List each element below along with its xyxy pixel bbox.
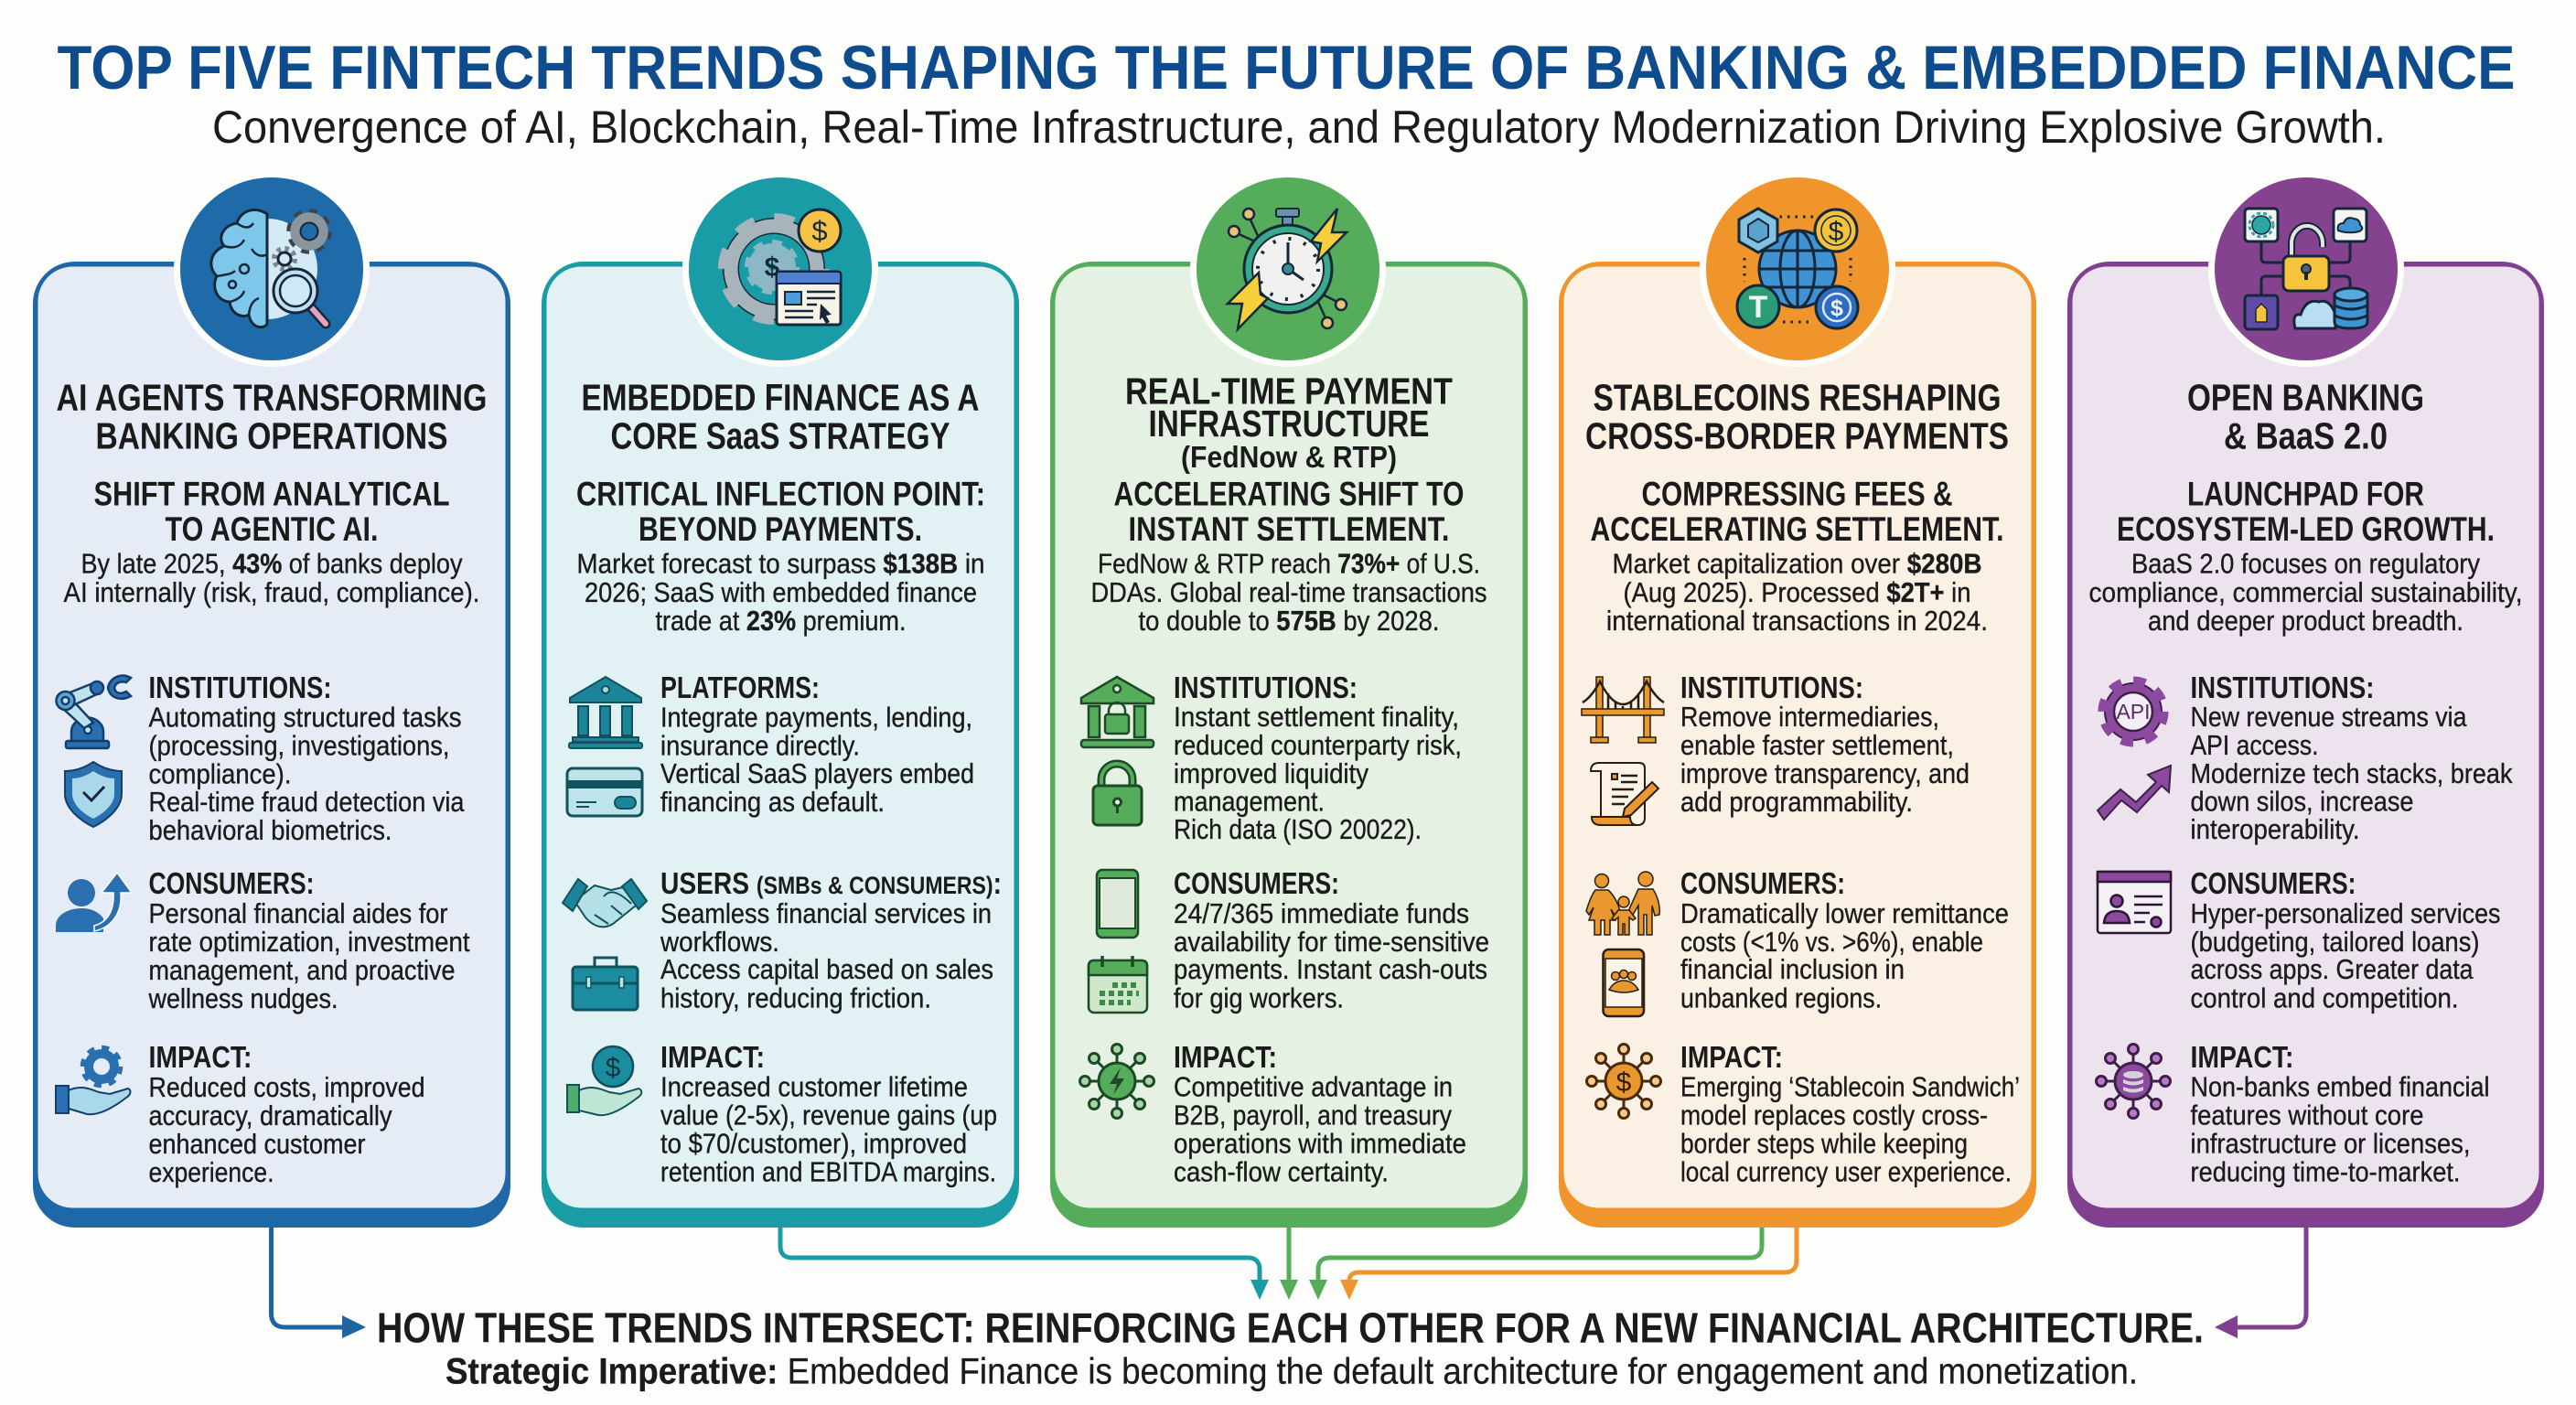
icon: phone with community bbox=[1603, 949, 1644, 1016]
panel 4 institutions text: enable faster settlement, bbox=[1680, 729, 1954, 761]
panel 3 institutions text: improved liquidity bbox=[1174, 757, 1368, 789]
panel 4 institutions text bbox=[1680, 670, 1970, 818]
panel 1 key statistic: By late 2025, 43% of banks deploy bbox=[80, 547, 463, 580]
panel 2 impact text bbox=[660, 1040, 997, 1187]
panel 3 consumers text: 24/7/365 immediate funds bbox=[1174, 897, 1469, 929]
panel 2 users text: Access capital based on sales bbox=[660, 953, 993, 985]
panel 5 heading bbox=[2187, 377, 2424, 457]
panel 4 impact text: border steps while keeping bbox=[1680, 1127, 1968, 1160]
panel 1 key statistic bbox=[64, 547, 479, 608]
panel 3 card bbox=[1050, 262, 1528, 1228]
panel 5 institutions text: API access. bbox=[2190, 729, 2318, 761]
panel 1 impact text: Reduced costs, improved bbox=[148, 1071, 424, 1103]
icon: coin on open hand: $ bbox=[606, 1053, 621, 1083]
panel 4 key statistic: (Aug 2025). Processed $2T+ in bbox=[1623, 576, 1970, 608]
panel 2 subheading bbox=[576, 476, 985, 548]
panel 1 impact text: accuracy, dramatically bbox=[148, 1099, 392, 1132]
strategic imperative line: Strategic Imperative: Embedded Finance is becoming the default architecture for engagement and monetization. bbox=[445, 1352, 2138, 1392]
panel 3 impact text: Competitive advantage in bbox=[1174, 1070, 1453, 1103]
panel 4 consumers text: unbanked regions. bbox=[1680, 982, 1882, 1014]
panel 1 consumers text: CONSUMERS: bbox=[148, 866, 315, 900]
panel 5 consumers text: (budgeting, tailored loans) bbox=[2190, 926, 2479, 958]
panel 3 subheading: INSTANT SETTLEMENT. bbox=[1129, 510, 1449, 548]
panel 2 platforms text: Integrate payments, lending, bbox=[660, 701, 972, 734]
panel 1 subheading bbox=[93, 476, 450, 548]
panel 1 institutions text: (processing, investigations, bbox=[148, 730, 450, 761]
panel 2 subheading: BEYOND PAYMENTS. bbox=[639, 510, 922, 548]
icon: network with database bbox=[2097, 1045, 2170, 1118]
panel 1 heading bbox=[57, 377, 487, 457]
panel 3 impact text: cash-flow certainty. bbox=[1174, 1156, 1389, 1187]
panel 4 institutions text: add programmability. bbox=[1680, 786, 1913, 818]
panel 5 summary: compliance, commercial sustainability, bbox=[2089, 576, 2523, 608]
panel 1 key statistic: AI internally (risk, fraud, compliance). bbox=[64, 576, 479, 608]
panel 2 impact text: retention and EBITDA margins. bbox=[660, 1156, 996, 1187]
panel 1 subheading: SHIFT FROM ANALYTICAL bbox=[93, 476, 450, 512]
panel 3 consumers text: CONSUMERS: bbox=[1174, 866, 1339, 900]
icon: gears with coin and web window: $ bbox=[811, 215, 828, 247]
arrow: blue panel to summary bbox=[271, 1228, 366, 1338]
panel 3 key statistic: DDAs. Global real-time transactions bbox=[1090, 576, 1487, 608]
panel 4 subheading bbox=[1590, 476, 2003, 548]
icon: smartphone bbox=[1097, 870, 1138, 938]
panel 1 impact text: enhanced customer bbox=[148, 1128, 366, 1160]
panel 2 key statistic: trade at 23% premium. bbox=[655, 605, 906, 637]
panel 5 impact text: reducing time-to-market. bbox=[2190, 1156, 2461, 1187]
subtitle: Convergence of AI, Blockchain, Real-Time Infrastructure, and Regulatory Modernization Driving Explosive Growth. bbox=[212, 102, 2386, 153]
panel 2 impact text: IMPACT: bbox=[660, 1040, 765, 1074]
panel 4 key statistic: Market capitalization over $280B bbox=[1612, 547, 1981, 580]
panel 4 key statistic bbox=[1606, 547, 1988, 637]
panel 4 impact text bbox=[1680, 1040, 2020, 1187]
panel 1 card bbox=[33, 262, 510, 1228]
panel 5 institutions text: interoperability. bbox=[2190, 813, 2360, 845]
panel 5 summary: and deeper product breadth. bbox=[2148, 605, 2463, 637]
arrow: purple panel to summary bbox=[2215, 1228, 2306, 1338]
panel 2 users text bbox=[660, 866, 1002, 1014]
icon: globe with stablecoins: $ bbox=[1830, 295, 1843, 321]
panel 1 institutions text bbox=[148, 670, 465, 846]
panel 5 impact text: features without core bbox=[2190, 1099, 2424, 1131]
panel 5 institutions text: Modernize tech stacks, break bbox=[2190, 757, 2513, 789]
panel 1: AI agents bbox=[33, 171, 510, 1228]
arrow: green panel to summary bbox=[1280, 1228, 1298, 1300]
panel 3 heading: (FedNow & RTP) bbox=[1181, 440, 1397, 474]
icon: globe with stablecoins: T bbox=[1749, 290, 1768, 325]
icon: coin on open hand bbox=[567, 1046, 641, 1115]
panel 2 impact text: to $70/customer), improved bbox=[660, 1127, 967, 1160]
icon: bank with padlock bbox=[1081, 677, 1154, 747]
panel 2 platforms text: PLATFORMS: bbox=[660, 670, 820, 704]
panel 4 heading: CROSS-BORDER PAYMENTS bbox=[1585, 415, 2009, 457]
panel 3 key statistic: FedNow & RTP reach 73%+ of U.S. bbox=[1098, 547, 1480, 580]
panel 3 heading: INFRASTRUCTURE bbox=[1149, 402, 1429, 445]
icon: suspension bridge bbox=[1582, 677, 1664, 743]
panel 4: stablecoins bbox=[1559, 171, 2036, 1228]
panel 3 impact text: IMPACT: bbox=[1174, 1040, 1277, 1074]
panel 4 institutions text: INSTITUTIONS: bbox=[1680, 670, 1863, 704]
icon: API gear bbox=[2103, 681, 2163, 742]
icon: robot arm bbox=[57, 676, 131, 748]
panel 1 heading: AI AGENTS TRANSFORMING bbox=[57, 377, 487, 419]
panel 2 heading bbox=[582, 377, 979, 457]
panel 1 impact text bbox=[148, 1040, 424, 1188]
panel 2 platforms text: Vertical SaaS players embed bbox=[660, 757, 974, 789]
panel 5 institutions text bbox=[2190, 670, 2513, 845]
icon: padlock bbox=[1093, 764, 1142, 825]
panel 4 consumers text bbox=[1680, 866, 2009, 1014]
panel 1 subheading: TO AGENTIC AI. bbox=[165, 510, 379, 548]
panel 5 institutions text: INSTITUTIONS: bbox=[2190, 670, 2375, 704]
panel 5 consumers text: control and competition. bbox=[2190, 982, 2459, 1014]
panel 5 consumers text: Hyper-personalized services bbox=[2190, 897, 2501, 929]
panel 3 key statistic: to double to 575B by 2028. bbox=[1138, 605, 1440, 637]
panel 5 consumers text bbox=[2190, 866, 2501, 1014]
icon: credit card bbox=[567, 768, 642, 816]
icon: gears with coin and web window bbox=[682, 171, 878, 367]
icon: padlock with connected services bbox=[2208, 171, 2404, 367]
icon: network with dollar bbox=[1586, 1045, 1661, 1118]
panel 4 key statistic: international transactions in 2024. bbox=[1606, 605, 1988, 637]
panel 2 platforms text: financing as default. bbox=[660, 786, 885, 818]
panel 3 consumers text bbox=[1174, 866, 1489, 1014]
panel 3 consumers text: availability for time-sensitive bbox=[1174, 926, 1489, 958]
panel 2 users text: USERS (SMBs & CONSUMERS): bbox=[660, 866, 1002, 900]
panel 1 consumers text: rate optimization, investment bbox=[148, 926, 470, 958]
panel 2 heading: EMBEDDED FINANCE AS A bbox=[582, 377, 979, 419]
panel 4 consumers text: financial inclusion in bbox=[1680, 953, 1905, 985]
panel 3 heading: REAL-TIME PAYMENT bbox=[1125, 370, 1453, 412]
panel 1 impact text: IMPACT: bbox=[148, 1040, 252, 1074]
panel 2 users text: Seamless financial services in bbox=[660, 897, 992, 929]
panel 5 card bbox=[2067, 262, 2544, 1228]
icon: family bbox=[1586, 872, 1659, 935]
icon: person with rising arrow bbox=[56, 873, 132, 932]
panel 2 users text: workflows. bbox=[660, 926, 779, 958]
panel 4 subheading: COMPRESSING FEES & bbox=[1641, 476, 1952, 512]
panel 2 impact text: value (2-5x), revenue gains (up bbox=[660, 1099, 997, 1131]
panel 1 impact text: experience. bbox=[148, 1156, 274, 1188]
panel 2 users text: history, reducing friction. bbox=[660, 982, 931, 1014]
panel 1 institutions text: Real-time fraud detection via bbox=[148, 786, 465, 818]
panel 4 card bbox=[1559, 262, 2036, 1228]
panel 4 impact text: local currency user experience. bbox=[1680, 1156, 2012, 1187]
panel 3 institutions text: INSTITUTIONS: bbox=[1174, 670, 1358, 704]
panel 3 impact text: B2B, payroll, and treasury bbox=[1174, 1099, 1452, 1131]
summary headline: HOW THESE TRENDS INTERSECT: REINFORCING EACH OTHER FOR A NEW FINANCIAL ARCHITECTURE. bbox=[377, 1304, 2204, 1352]
panel 2 key statistic: Market forecast to surpass $138B in bbox=[576, 547, 984, 580]
panel 3 institutions text: management. bbox=[1174, 785, 1325, 818]
panel 1 heading: BANKING OPERATIONS bbox=[95, 415, 448, 457]
panel 3 heading bbox=[1125, 370, 1453, 474]
panel 1 institutions text: compliance). bbox=[148, 757, 291, 790]
panel 3 subheading bbox=[1114, 476, 1464, 548]
icon: contract scroll with pen bbox=[1591, 763, 1658, 825]
panel 2 impact text: Increased customer lifetime bbox=[660, 1070, 968, 1103]
panel 4 institutions text: improve transparency, and bbox=[1680, 757, 1970, 789]
panel 1 institutions text: INSTITUTIONS: bbox=[148, 670, 331, 704]
panel 2 heading: CORE SaaS STRATEGY bbox=[611, 415, 950, 457]
icon: gear on open hand bbox=[56, 1048, 130, 1114]
icon: globe with stablecoins bbox=[1700, 171, 1895, 367]
icon: network with dollar: $ bbox=[1616, 1067, 1632, 1098]
panel 4 institutions text: Remove intermediaries, bbox=[1680, 701, 1939, 733]
panel 5 institutions text: New revenue streams via bbox=[2190, 701, 2467, 733]
icon: bank building bbox=[569, 677, 642, 748]
panel 5 subheading: LAUNCHPAD FOR bbox=[2187, 476, 2424, 512]
panel 5 summary: BaaS 2.0 focuses on regulatory bbox=[2131, 547, 2480, 580]
icon: stopwatch with lightning bbox=[1190, 171, 1386, 367]
panel 3 subheading: ACCELERATING SHIFT TO bbox=[1114, 476, 1464, 512]
panel 5 subheading: ECOSYSTEM-LED GROWTH. bbox=[2117, 510, 2495, 548]
panel 3 consumers text: for gig workers. bbox=[1174, 982, 1344, 1014]
panel 2 platforms text: insurance directly. bbox=[660, 730, 860, 761]
panel 5 institutions text: down silos, increase bbox=[2190, 785, 2413, 818]
panel 5 heading: & BaaS 2.0 bbox=[2224, 415, 2388, 457]
arrow: teal panel to summary bbox=[780, 1228, 1269, 1300]
icon: brain with gears and magnifier bbox=[174, 171, 370, 367]
panel 5 summary bbox=[2089, 547, 2523, 637]
icon: profile window bbox=[2098, 872, 2171, 933]
icon: network with lightning bbox=[1079, 1045, 1154, 1118]
panel 4 consumers text: Dramatically lower remittance bbox=[1680, 897, 2009, 929]
connector arrows bbox=[271, 1228, 2306, 1338]
panel 5 impact text: Non-banks embed financial bbox=[2190, 1070, 2490, 1103]
panel 2 platforms text bbox=[660, 670, 974, 818]
panel 4 impact text: IMPACT: bbox=[1680, 1040, 1783, 1074]
panel 1 consumers text: management, and proactive bbox=[148, 954, 456, 986]
panel 5 consumers text: across apps. Greater data bbox=[2190, 953, 2474, 985]
icon: rising chart arrow bbox=[2098, 766, 2171, 820]
panel 3 institutions text bbox=[1174, 670, 1462, 845]
panel 4 impact text: model replaces costly cross- bbox=[1680, 1099, 1988, 1131]
panel 2 card bbox=[542, 262, 1019, 1228]
arrow: orange panel to summary bbox=[1340, 1228, 1797, 1300]
panel 4 subheading: ACCELERATING SETTLEMENT. bbox=[1590, 510, 2003, 548]
panel 4 consumers text: CONSUMERS: bbox=[1680, 866, 1845, 900]
panel 4 heading bbox=[1585, 377, 2009, 457]
panel 4 impact text: Emerging ‘Stablecoin Sandwich’ bbox=[1680, 1070, 2020, 1103]
panel 3 institutions text: Instant settlement finality, bbox=[1174, 701, 1459, 733]
panel 3 key statistic bbox=[1090, 547, 1487, 637]
arrow: green second branch to summary bbox=[1309, 1228, 1762, 1300]
icon: globe with stablecoins: $ bbox=[1829, 217, 1844, 247]
icon: handshake bbox=[563, 879, 647, 927]
panel 5 impact text: IMPACT: bbox=[2190, 1040, 2294, 1074]
panel 3: real-time payments bbox=[1050, 171, 1528, 1228]
panel 4 consumers text: costs (<1% vs. >6%), enable bbox=[1680, 926, 1983, 958]
panel 1 consumers text: wellness nudges. bbox=[148, 982, 338, 1014]
icon: calendar bbox=[1089, 956, 1147, 1013]
panel 3 consumers text: payments. Instant cash-outs bbox=[1174, 953, 1487, 985]
panel 5 subheading bbox=[2117, 476, 2495, 548]
panel 5 consumers text: CONSUMERS: bbox=[2190, 866, 2356, 900]
panel 3 institutions text: reduced counterparty risk, bbox=[1174, 729, 1462, 761]
panel 5 heading: OPEN BANKING bbox=[2187, 377, 2424, 419]
icon: API gear: API bbox=[2116, 700, 2151, 724]
panel 2 subheading: CRITICAL INFLECTION POINT: bbox=[576, 476, 985, 512]
panel 2 key statistic: 2026; SaaS with embedded finance bbox=[585, 576, 977, 608]
panel 1 institutions text: Automating structured tasks bbox=[148, 701, 461, 734]
panel 2: embedded finance bbox=[542, 171, 1019, 1228]
panel 5: open banking bbox=[2067, 171, 2544, 1228]
panel 3 impact text: operations with immediate bbox=[1174, 1127, 1466, 1160]
panel 4 heading: STABLECOINS RESHAPING bbox=[1594, 377, 2002, 419]
panel 5 impact text bbox=[2190, 1040, 2490, 1187]
icon: briefcase bbox=[573, 958, 638, 1010]
panel 3 institutions text: Rich data (ISO 20022). bbox=[1174, 813, 1422, 845]
icon: gears with coin and web window: $ bbox=[765, 252, 780, 283]
panel 1 consumers text: Personal financial aides for bbox=[148, 897, 448, 929]
panel 3 impact text bbox=[1174, 1040, 1466, 1187]
icon: shield with check bbox=[65, 762, 122, 827]
panel 5 impact text: infrastructure or licenses, bbox=[2190, 1127, 2470, 1160]
panel 1 consumers text bbox=[148, 866, 470, 1014]
panel 2 key statistic bbox=[576, 547, 984, 637]
panel 1 institutions text: behavioral biometrics. bbox=[148, 814, 392, 846]
